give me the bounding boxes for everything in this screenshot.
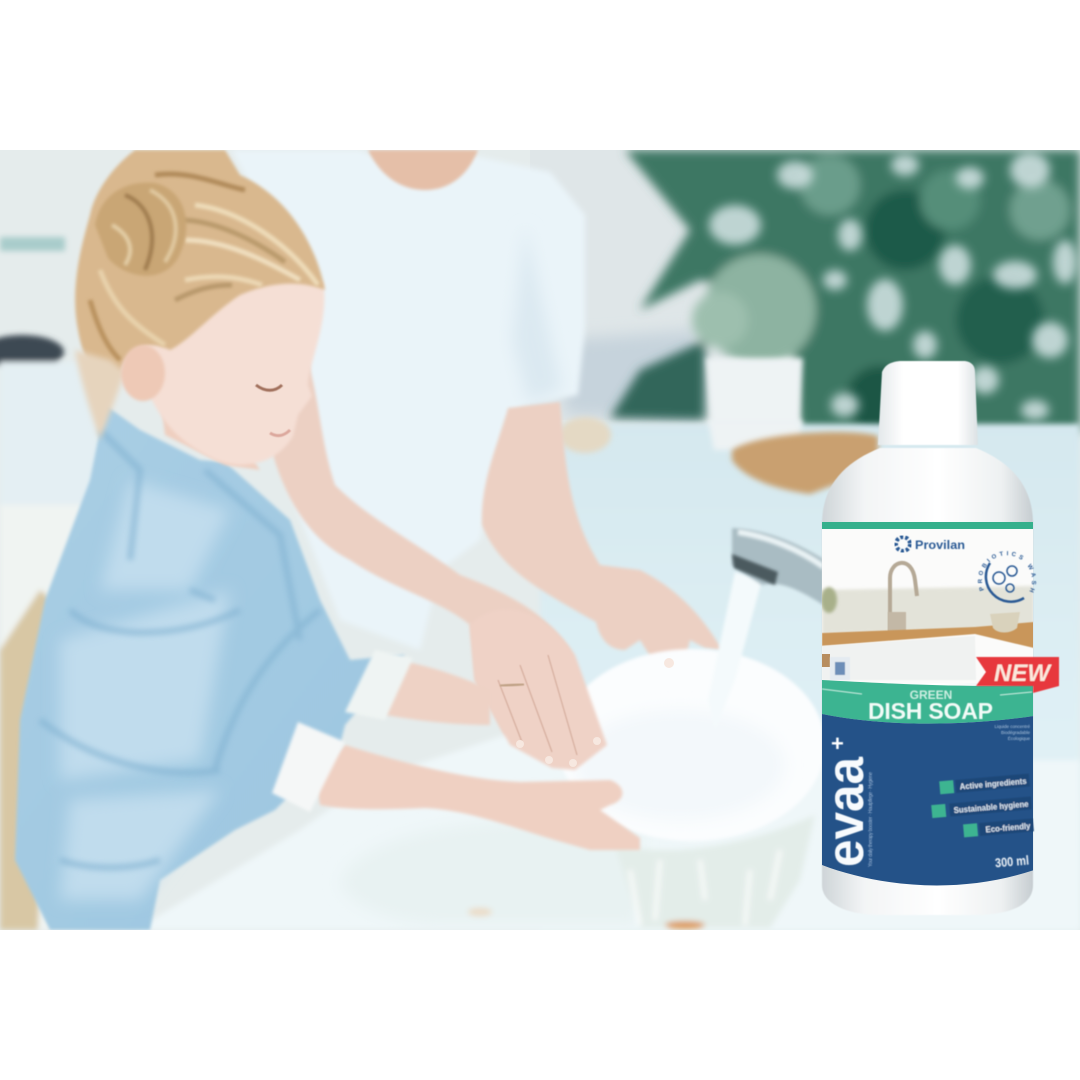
window wall behind plant — [530, 150, 730, 420]
small note — [994, 724, 1030, 741]
plant foliage — [610, 150, 1080, 434]
plant leaf highlights — [709, 152, 1077, 420]
green top band — [822, 522, 1034, 529]
wooden tray — [732, 432, 878, 494]
table surface — [542, 420, 1080, 756]
product name — [822, 688, 1032, 724]
girl: shirt shading — [40, 430, 320, 868]
girl: denim shirt — [15, 405, 405, 930]
label plant — [821, 587, 837, 613]
girl: ear — [121, 345, 165, 401]
product name: GREEN — [910, 688, 952, 702]
label brand icon — [896, 537, 910, 551]
product bottle — [817, 360, 1060, 915]
woman: left arm and hand — [272, 368, 566, 732]
white pot base over table — [708, 420, 802, 450]
girl: far arm — [385, 660, 490, 725]
left counter and shelf — [0, 234, 78, 930]
girl: near arm and hand — [315, 745, 640, 850]
white plate — [559, 649, 825, 841]
small note: Liquide concentré — [994, 724, 1030, 729]
label bowl — [990, 612, 1020, 632]
girl: neck — [162, 417, 260, 471]
bottle cap — [878, 361, 978, 445]
bun strands — [112, 190, 176, 270]
girl: rolled sleeve cuff — [272, 722, 345, 812]
label brand: Provilan: Provilan — [915, 538, 965, 552]
ring — [500, 684, 524, 686]
girl: hair — [75, 150, 325, 377]
benefit list — [929, 774, 1034, 840]
bottle body — [822, 448, 1033, 915]
benefit: Active ingredients: Active ingredients — [959, 777, 1027, 792]
girl: shirt light areas — [60, 480, 230, 900]
NEW ribbon: NEW — [994, 660, 1052, 687]
label kitchen image — [822, 528, 1034, 683]
label sink — [822, 636, 976, 680]
girl: hair bun — [95, 183, 186, 276]
probiotic badge: PROBIOTICS WASH — [977, 550, 1037, 594]
NEW ribbon — [976, 657, 1059, 693]
small note: Écologique — [1008, 735, 1030, 741]
woman: neck and chin — [368, 150, 478, 190]
water stream and faucet — [718, 526, 822, 656]
benefit: Sustainable hygiene: Sustainable hygiene — [953, 800, 1029, 815]
fingers gaps — [498, 655, 577, 755]
small logo square — [830, 657, 850, 680]
woman: shirt shading — [514, 262, 558, 396]
bottle label — [821, 522, 1034, 885]
sink basin — [135, 730, 1080, 930]
splash water — [468, 815, 815, 929]
benefit: Eco-friendly: Eco-friendly — [985, 822, 1031, 834]
evaa brand vertical: evaa — [817, 756, 875, 867]
white pot — [702, 354, 808, 424]
photo: kitchen scene — [0, 150, 1080, 930]
girl: far cuff — [345, 650, 413, 720]
volume: 300 ml — [994, 853, 1030, 870]
plus mark: + — [831, 731, 844, 756]
small note: Biodégradable — [1001, 730, 1030, 735]
background wall — [0, 150, 1080, 930]
label tile wall — [822, 586, 1034, 634]
girl: hair strands — [90, 174, 318, 360]
girl: face — [139, 279, 324, 465]
woman's hand over plate redraw — [470, 609, 607, 770]
woman: T-shirt — [232, 150, 585, 650]
girl: eye and mouth — [256, 385, 290, 436]
product name: DISH SOAP — [868, 698, 993, 724]
label countertop — [822, 622, 1034, 648]
small vertical tagline: Your daily therapy booster · Hautpflege · Hygiene — [868, 772, 874, 867]
fingernails — [516, 658, 674, 767]
green band lower — [822, 680, 1034, 724]
blue panel — [822, 714, 1034, 885]
woman: right arm and hand — [482, 402, 722, 672]
label faucet — [890, 563, 917, 632]
wooden item near shirt — [559, 417, 611, 453]
girl: wispy hair — [75, 350, 125, 440]
